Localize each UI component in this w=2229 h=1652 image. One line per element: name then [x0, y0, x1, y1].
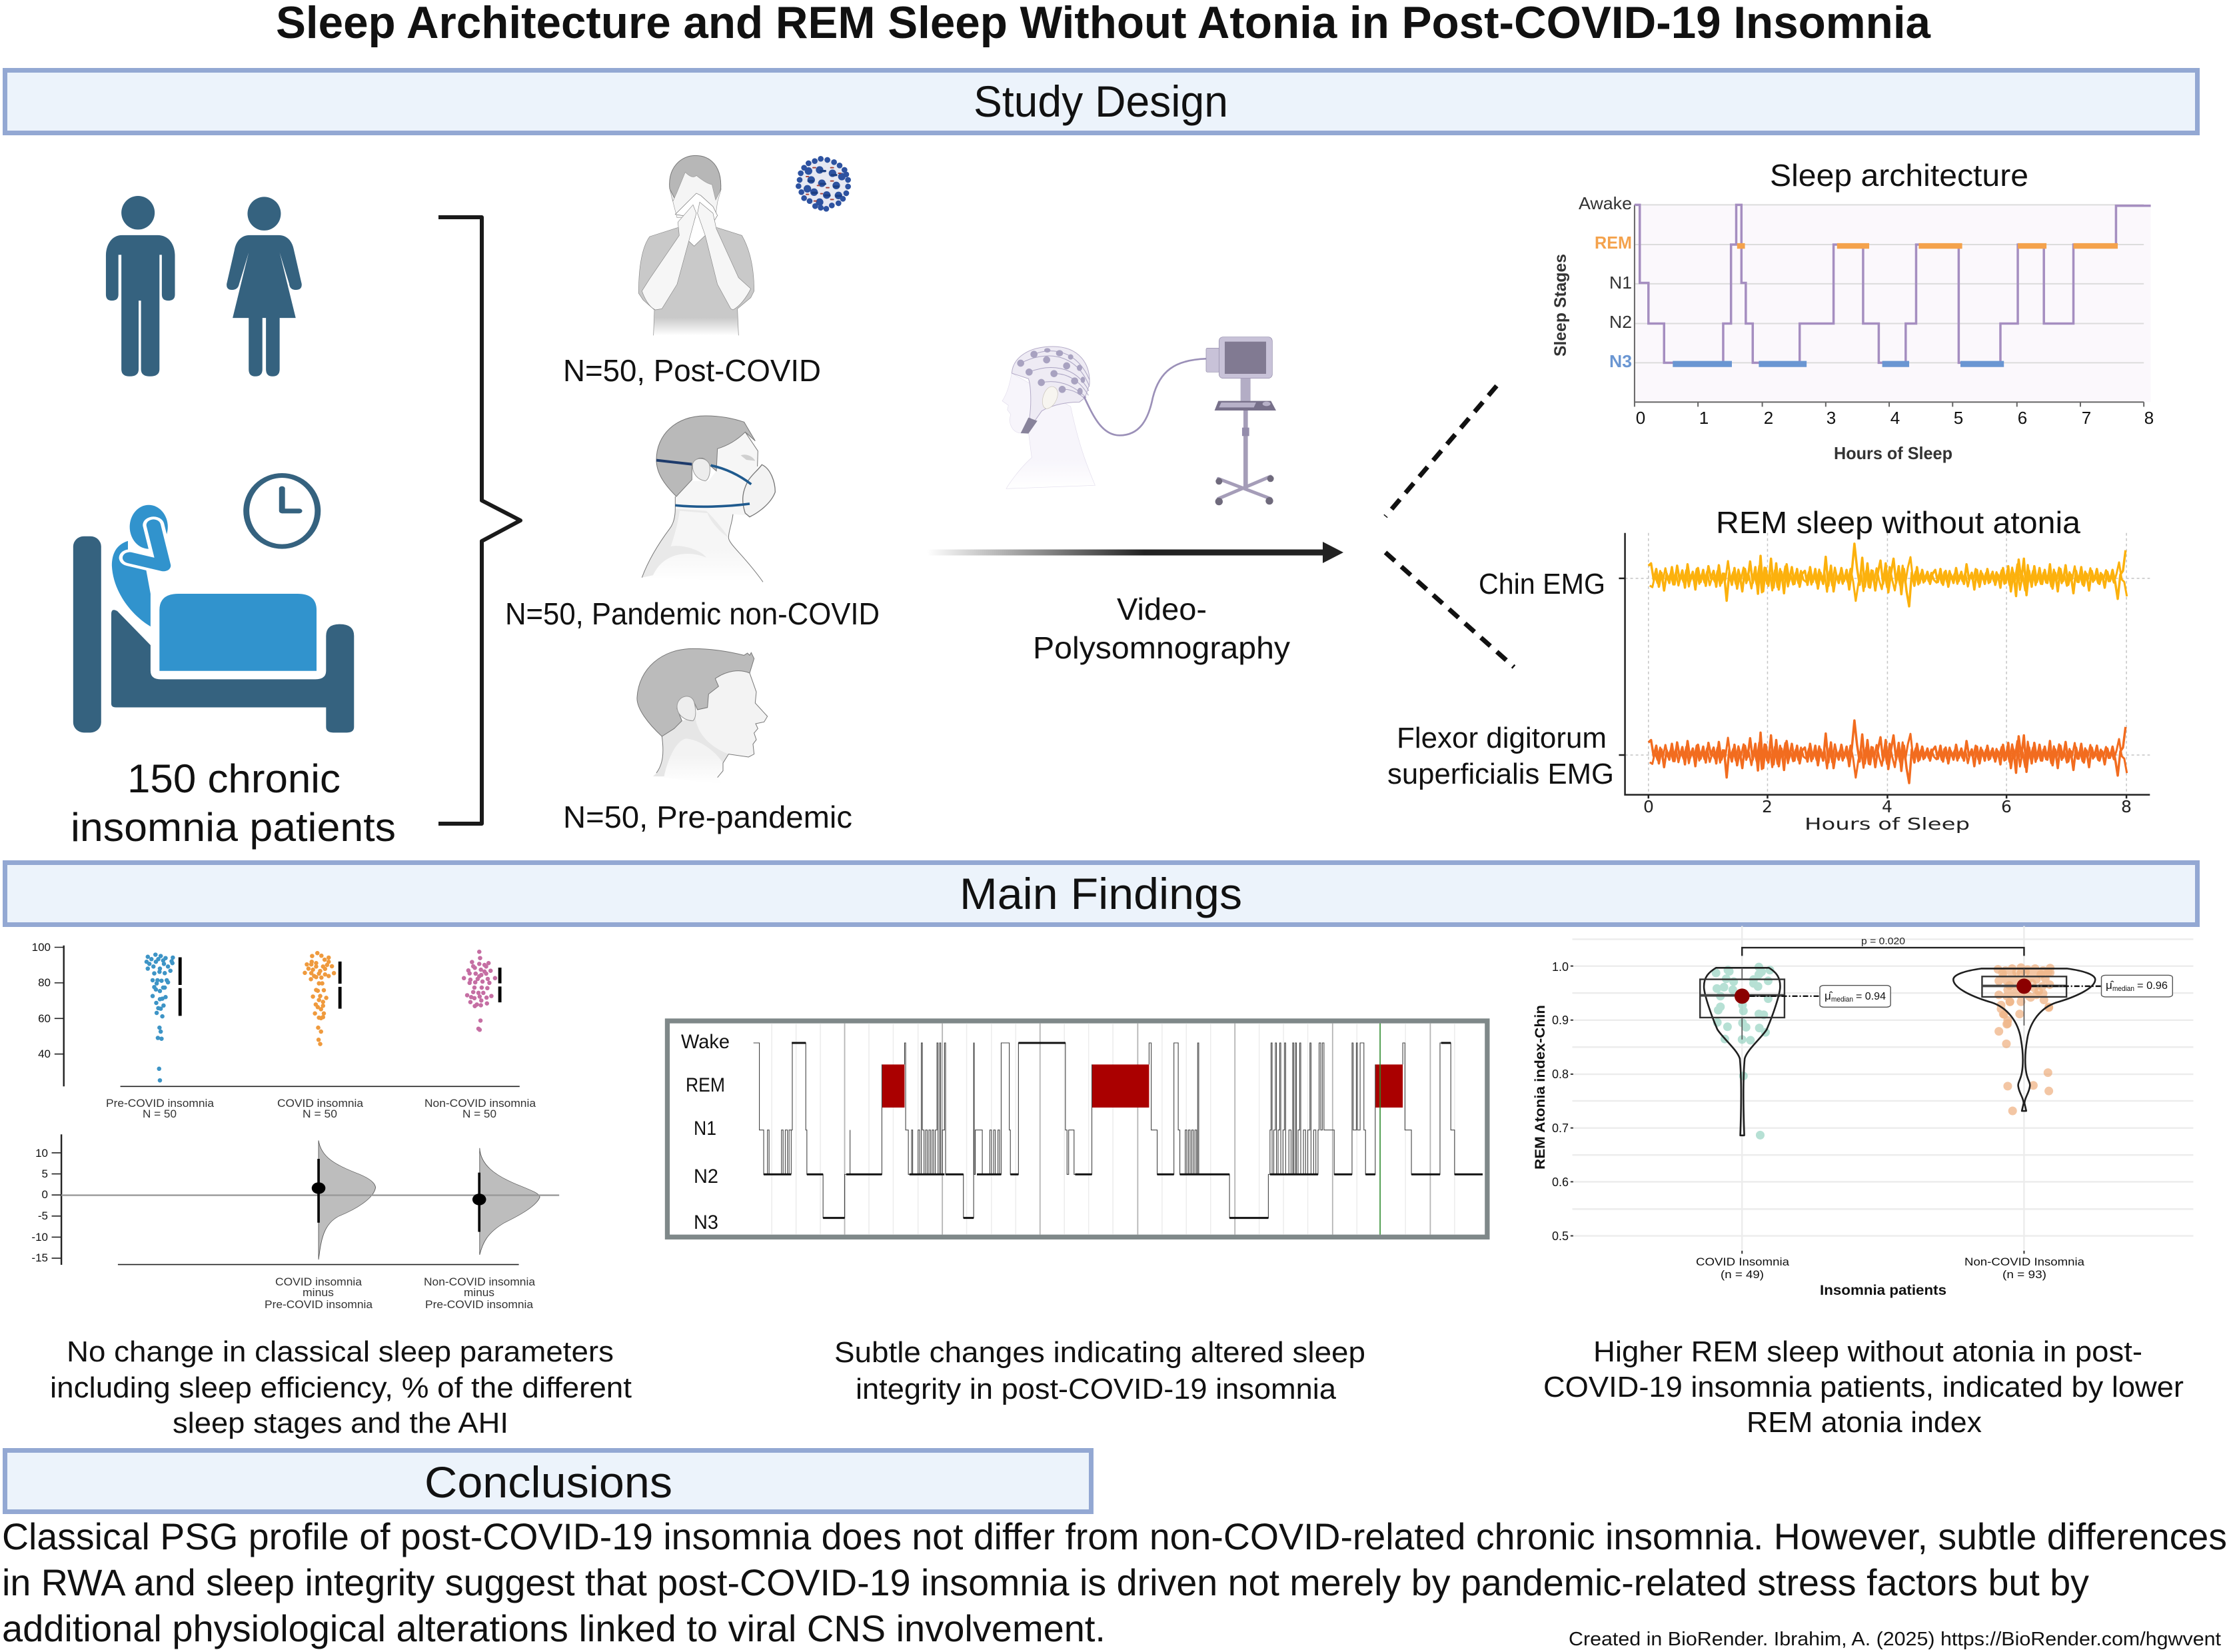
- illustration: post-COVID person sneezing: [638, 155, 754, 335]
- median label: non-COVID: [2106, 979, 2168, 993]
- caption: classical sleep parameters: No change in classical sleep parameters: [67, 1335, 614, 1368]
- group labels: Pre-COVID insomnia: [106, 1097, 215, 1110]
- text: video-polysomnography: [1033, 592, 1290, 665]
- arrow: [927, 542, 1343, 563]
- x axis labels: 6: [2018, 408, 2027, 428]
- chart: violin and box plot: [1571, 926, 2193, 1253]
- illustration: video-polysomnography setup: [1002, 337, 1276, 505]
- x axis labels: 1: [1699, 408, 1709, 428]
- y axis labels: 80: [38, 976, 51, 989]
- x axis labels: 7: [2082, 408, 2091, 428]
- comparison labels: minus: [464, 1286, 494, 1299]
- x axis labels: 0: [1636, 408, 1645, 428]
- caption: classical sleep parameters: sleep stages and the AHI: [173, 1407, 508, 1439]
- y axis labels: [32, 941, 51, 1060]
- significance label: p = 0.020: [1861, 936, 1905, 947]
- group labels: Non-COVID Insomnia: [1964, 1255, 2085, 1268]
- caption: REM atonia index: Higher REM sleep without atonia in post-: [1593, 1335, 2142, 1368]
- text: conclusions: in RWA and sleep integrity suggest that post-COVID-19 insomnia is driven not merely by pandemic-related stress factors but by: [2, 1561, 2089, 1603]
- x axis labels: 8: [2144, 408, 2154, 428]
- icon: person awake in bed: [73, 505, 354, 732]
- y axis labels: 0: [42, 1188, 48, 1201]
- chart: swarm plot: [55, 946, 520, 1086]
- text: pre-pandemic group: N=50, Pre-pandemic: [563, 800, 852, 834]
- text: conclusions: additional physiological alterations linked to viral CNS involvement.: [2, 1607, 1106, 1649]
- text: conclusions: [2, 1515, 2227, 1649]
- text: cohort size: insomnia patients: [71, 805, 396, 850]
- y axis labels: [1579, 193, 1632, 371]
- panel: hypnogram finding: [665, 1018, 1489, 1405]
- x axis labels: 2: [1764, 408, 1773, 428]
- comparison labels: COVID insomnia: [275, 1275, 363, 1288]
- y axis labels: -15: [31, 1251, 48, 1264]
- group labels: N = 50: [303, 1108, 337, 1120]
- stage labels: N1: [694, 1118, 716, 1140]
- caption: sleep integrity: [834, 1336, 1365, 1405]
- group labels: [106, 1097, 536, 1120]
- icon: clock: [247, 475, 318, 546]
- y axis labels: 40: [38, 1048, 51, 1060]
- panel: REM sleep without atonia chart: [1387, 505, 2150, 834]
- heading: conclusions banner: Conclusions: [424, 1457, 672, 1507]
- group labels: (n = 49): [1721, 1268, 1764, 1281]
- group labels: Non-COVID insomnia: [424, 1097, 536, 1110]
- chart: hypnogram with REM blocks: [665, 1018, 1489, 1239]
- panel: estimation plot: [31, 941, 632, 1439]
- x axis labels: 8: [2121, 797, 2132, 816]
- axis title: hours of sleep: Hours of Sleep: [1805, 814, 1970, 834]
- heading: main findings banner: Main Findings: [960, 869, 1242, 918]
- caption: REM atonia index: REM atonia index: [1747, 1406, 1982, 1439]
- chart: mean difference half violins: [52, 1134, 559, 1265]
- group labels: N = 50: [143, 1108, 177, 1120]
- dashed connector lines: [1385, 386, 1514, 667]
- icon: woman: [227, 197, 302, 377]
- stage labels: N2: [694, 1166, 718, 1188]
- y axis labels: [31, 1147, 48, 1264]
- median label: non-COVID: median: [2112, 985, 2134, 993]
- y axis labels: 0.9: [1552, 1014, 1569, 1027]
- text: conclusions: Classical PSG profile of post-COVID-19 insomnia does not differ from non-COVID-related chronic insomnia. However, subtle differences: [2, 1515, 2227, 1557]
- comparison labels: Pre-COVID insomnia: [265, 1298, 373, 1311]
- axis title: REM atonia index chin: REM Atonia index-Chin: [1533, 1005, 1548, 1170]
- panel: REM atonia index violin plot: [1533, 926, 2193, 1439]
- axis title: sleep stages: Sleep Stages: [1551, 254, 1570, 357]
- y axis labels: 10: [35, 1147, 48, 1160]
- heading: main findings banner: [5, 862, 2198, 925]
- x axis labels: 4: [1890, 408, 1900, 428]
- y axis labels: 60: [38, 1012, 51, 1025]
- stage labels: REM: [686, 1074, 725, 1096]
- comparison labels: Pre-COVID insomnia: [425, 1298, 534, 1311]
- axis title: insomnia patients: Insomnia patients: [1820, 1283, 1946, 1298]
- icon: coronavirus: [798, 159, 848, 209]
- median label: non-COVID: μ̂: [2106, 979, 2114, 992]
- label: chin EMG: Chin EMG: [1479, 568, 1605, 600]
- caption: sleep integrity: integrity in post-COVID-19 insomnia: [856, 1373, 1337, 1405]
- illustration: pre-pandemic head: [637, 648, 768, 784]
- y axis labels: 1.0: [1552, 960, 1569, 974]
- heading: study design banner: Study Design: [974, 77, 1228, 126]
- icon: man: [106, 196, 175, 377]
- y axis labels: 5: [42, 1168, 48, 1180]
- comparison labels: [265, 1275, 536, 1311]
- stage labels: N3: [694, 1212, 718, 1234]
- comparison labels: Non-COVID insomnia: [424, 1275, 536, 1288]
- heading: sleep architecture: Sleep architecture: [1770, 158, 2028, 193]
- median label: COVID: [1825, 990, 1886, 1004]
- text: post-COVID group: N=50, Post-COVID: [563, 353, 821, 388]
- comparison labels: minus: [303, 1286, 334, 1299]
- y axis labels: 0.7: [1552, 1122, 1569, 1135]
- x axis labels: [1636, 408, 2154, 428]
- caption: classical sleep parameters: [50, 1335, 632, 1439]
- group labels: N = 50: [462, 1108, 496, 1120]
- y axis labels: N1: [1609, 273, 1632, 293]
- group labels: COVID Insomnia: [1696, 1255, 1790, 1268]
- median label: COVID: μ̂: [1825, 990, 1833, 1002]
- x axis labels: 2: [1762, 797, 1773, 816]
- label: flexor digitorum superficialis EMG: [1387, 722, 1614, 790]
- y axis labels: 0.8: [1552, 1068, 1569, 1081]
- y axis labels: [1552, 960, 1569, 1243]
- y axis labels: Awake: [1579, 193, 1632, 213]
- heading: REM sleep without atonia: REM sleep without atonia: [1716, 505, 2080, 540]
- stage labels: Wake: [681, 1031, 730, 1053]
- credit: Created in BioRender. Ibrahim, A. (2025) https://BioRender.com/hgwvent: [1569, 1629, 2221, 1650]
- x axis labels: 5: [1954, 408, 1963, 428]
- panel: three groups: [505, 155, 880, 834]
- heading: study design banner: [5, 71, 2198, 133]
- caption: REM atonia index: COVID-19 insomnia patients, indicated by lower: [1543, 1371, 2184, 1403]
- y axis labels: 0.6: [1552, 1176, 1569, 1189]
- y axis labels: N2: [1609, 312, 1632, 332]
- caption: REM atonia index: [1543, 1335, 2184, 1439]
- group labels: (n = 93): [2002, 1268, 2046, 1281]
- text: video-polysomnography: Polysomnography: [1033, 630, 1290, 665]
- heading: conclusions banner: [5, 1450, 1092, 1511]
- y axis labels: -10: [31, 1231, 48, 1243]
- illustration: person wearing a mask: [642, 416, 775, 582]
- label: flexor digitorum superficialis EMG: Flexor digitorum: [1397, 722, 1607, 754]
- x axis labels: 3: [1827, 408, 1836, 428]
- y axis labels: -5: [38, 1210, 48, 1222]
- x axis labels: 0: [1643, 797, 1654, 816]
- label: flexor digitorum superficialis EMG: superficialis EMG: [1387, 758, 1614, 790]
- x axis labels: [1643, 797, 2132, 816]
- panel: patient cohort: [71, 196, 396, 850]
- axis title: hours of sleep: Hours of Sleep: [1834, 443, 1952, 463]
- caption: classical sleep parameters: including sleep efficiency, % of the different: [50, 1371, 632, 1404]
- caption: sleep integrity: Subtle changes indicating altered sleep: [834, 1336, 1365, 1369]
- text: cohort size: [71, 756, 396, 850]
- group labels: COVID insomnia: [277, 1097, 364, 1110]
- median label: non-COVID: = 0.96: [2137, 980, 2168, 992]
- text: cohort size: 150 chronic: [127, 756, 341, 801]
- x axis labels: 6: [2001, 797, 2012, 816]
- panel: sleep architecture chart: [1551, 158, 2154, 463]
- y axis labels: 0.5: [1552, 1230, 1569, 1243]
- group labels: [1696, 1255, 2085, 1281]
- y axis labels: REM: [1595, 233, 1632, 253]
- y axis labels: N3: [1609, 351, 1632, 371]
- chart: hypnogram: [1635, 205, 2151, 407]
- text: video-polysomnography: Video-: [1117, 592, 1207, 626]
- stage labels: [681, 1031, 730, 1234]
- median label: COVID: median: [1831, 996, 1853, 1004]
- x axis labels: 4: [1882, 797, 1892, 816]
- y axis labels: 100: [32, 941, 51, 954]
- text: pandemic group: N=50, Pandemic non-COVID: [505, 596, 880, 631]
- median label: COVID: = 0.94: [1856, 991, 1886, 1002]
- bracket: [438, 217, 520, 824]
- chart: EMG traces: [1619, 533, 2150, 798]
